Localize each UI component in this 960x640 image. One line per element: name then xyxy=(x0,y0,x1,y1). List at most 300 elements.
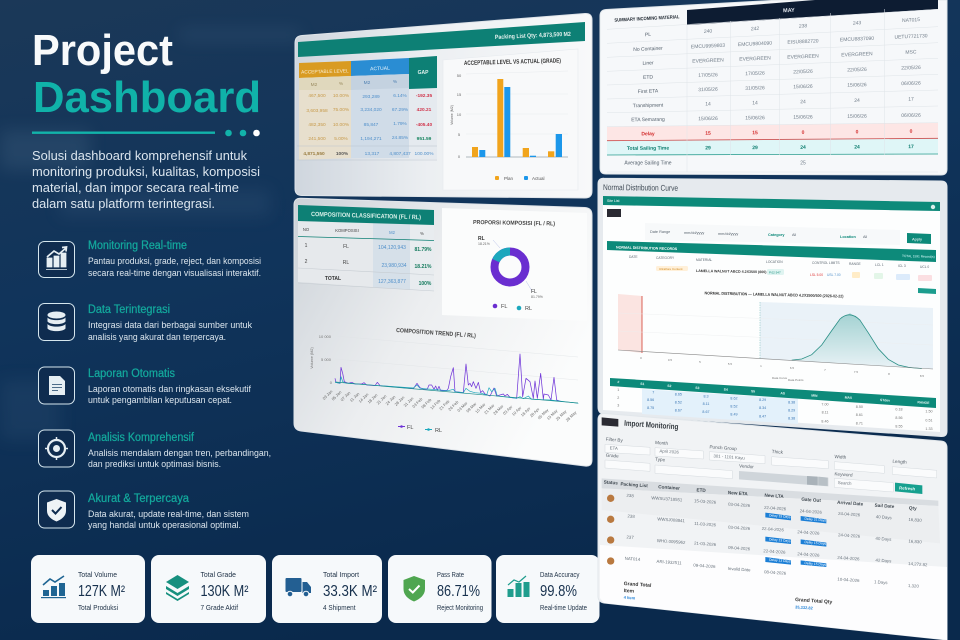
row 3: 237 xyxy=(626,534,634,540)
row 3: 24-04-2026 xyxy=(837,555,860,561)
table header and shaded rows: Packing List xyxy=(620,481,648,488)
acceptable level table: 75.00% xyxy=(333,107,350,113)
title divider with dots xyxy=(32,130,260,136)
row: ETD: 22/05/26 xyxy=(793,69,813,75)
icon: database xyxy=(38,304,74,340)
row: delay: 0 xyxy=(856,129,859,135)
row: ETD: 17/05/26 xyxy=(698,72,718,79)
row 3: 21-03-2026 xyxy=(694,541,717,547)
row 3 xyxy=(607,534,928,567)
statistics table: 8.50 xyxy=(856,405,863,409)
chart: composition trend: 15 May xyxy=(546,408,558,421)
statistics table: # xyxy=(617,380,620,384)
icon: document xyxy=(38,367,74,404)
stat card: data accuracy: Real-time Update xyxy=(540,603,587,612)
row: transhipment: 24 xyxy=(854,98,860,104)
filter form: Keyword xyxy=(834,471,853,478)
feature: laporan otomatis: untuk pengambilan keputusan cepat. xyxy=(88,395,232,406)
feature: akurat dan terpercaya: yang handal untuk operasional optimal. xyxy=(88,520,241,531)
filter row: All xyxy=(863,235,867,239)
acceptable level table: 241,500 xyxy=(308,136,326,142)
row: first ETA: 31/05/26 xyxy=(698,87,718,93)
statistics table: RANGE xyxy=(917,400,930,405)
filter form: 301 - 1101 Kayu xyxy=(713,453,746,461)
records table: CONTROL LIMITS xyxy=(812,261,840,265)
row 1 xyxy=(607,493,922,523)
row 4: Invalid Date xyxy=(728,566,751,573)
row 4: 1 Days xyxy=(874,579,888,585)
chart: composition trend: 21 Feb xyxy=(438,398,451,411)
row: no container: EMCU9804090 xyxy=(738,41,772,48)
row 1: 238 xyxy=(626,493,634,498)
row: ETD: 17/05/26 xyxy=(745,71,765,77)
acceptable level table: M2 xyxy=(311,82,318,88)
row: average sailing time: 25 xyxy=(800,160,806,166)
chart: composition trend: 28 May xyxy=(565,410,577,423)
statistics table: 8.46 xyxy=(821,419,829,423)
row: delay: 15 xyxy=(705,131,711,137)
donut chart: proporsi komposisi: RL xyxy=(525,306,532,312)
composition classification table: 100% xyxy=(419,281,432,287)
feature: laporan otomatis: Laporan otomatis dan ringkasan eksekutif xyxy=(88,384,251,395)
chart: normal distribution: 0 xyxy=(640,356,642,360)
row 4: 1,320 xyxy=(908,583,920,589)
row 2 xyxy=(607,513,922,547)
row: total sailing time: Total Sailing Time xyxy=(627,146,669,152)
table header and shaded rows: Status xyxy=(603,480,618,486)
row: average sailing time: Average Sailing Time xyxy=(624,160,672,166)
records table: UCL 0 xyxy=(920,265,929,269)
filter form: Grade xyxy=(606,453,619,459)
donut chart: proporsi komposisi: RL xyxy=(478,236,485,242)
chart: composition trend: 25 May xyxy=(555,409,567,422)
statistics table: 8.62 xyxy=(730,396,738,400)
row 1: 22-04-2026 xyxy=(764,505,787,511)
row: transhipment: 14 xyxy=(752,100,758,106)
heading: Normal Distribution Curve xyxy=(603,183,678,193)
filter row: Location xyxy=(840,235,857,239)
icon: rising chart xyxy=(38,242,74,278)
statistics table xyxy=(610,378,936,431)
chart: composition trend: 11 Jan xyxy=(349,391,360,403)
acceptable level table: 10.00% xyxy=(333,122,350,128)
stat card: total grade xyxy=(151,555,266,623)
donut chart: proporsi komposisi: FL xyxy=(501,304,507,310)
statistics table: 8.56 xyxy=(647,398,654,402)
statistics table: 1.33 xyxy=(925,427,933,431)
statistics table: 8.49 xyxy=(730,412,738,416)
statistics table: 8.67 xyxy=(702,410,710,414)
statistics table: 7 xyxy=(652,391,654,395)
statistics table: 8.3 xyxy=(703,394,709,398)
row: PL: 243 xyxy=(853,20,861,27)
acceptable level table: 3,603,958 xyxy=(306,108,328,114)
row: no container: UETU7721730 xyxy=(894,33,928,41)
row: ETA semarang: 15/06/26 xyxy=(793,114,813,121)
chart: acceptable level vs actual: Actual xyxy=(532,176,545,181)
acceptable level table: ACTUAL xyxy=(370,66,390,72)
composition classification table: % xyxy=(420,231,424,236)
chart: composition trend: 03 Jan xyxy=(321,389,333,401)
row: total sailing time: 24 xyxy=(854,144,860,150)
acceptable level table: 4,871,550 xyxy=(303,151,325,157)
chart: normal distribution: NORMAL DISTRIBUTION — LAMELLA WALNUT ABCD 4.2X3500/500 (2026-02-22) xyxy=(704,290,844,299)
table header and shaded rows: Gate Out xyxy=(801,497,822,503)
statistics table: MIN xyxy=(811,393,818,398)
row: ETA semarang: 06/06/26 xyxy=(901,113,921,119)
composition classification table: TOTAL xyxy=(325,276,341,282)
records table: ICL 3 xyxy=(898,264,906,268)
feature: data terintegrasi xyxy=(38,304,252,343)
table header and shaded rows: New ETA xyxy=(728,490,748,496)
statistics table: 8.75 xyxy=(647,406,654,410)
row 2: 238 xyxy=(627,513,635,519)
row: total sailing time xyxy=(627,144,914,152)
stat card: total grade: Total Grade xyxy=(200,570,236,579)
row 1: 40 Days xyxy=(876,514,892,520)
row: first ETA: 15/06/26 xyxy=(847,82,867,89)
acceptable level table: 85,847 xyxy=(364,122,379,128)
panel: composition xyxy=(294,198,592,466)
row 4: ARI-1932511 xyxy=(656,559,682,566)
row: PL: 242 xyxy=(751,26,759,32)
acceptable level table: 10.00% xyxy=(333,93,350,99)
icon: shield xyxy=(38,491,74,528)
row: first ETA xyxy=(638,81,921,95)
donut chart: proporsi komposisi: 81.79% xyxy=(531,295,543,299)
composition classification table: NO xyxy=(303,227,310,232)
chart: composition trend: 31 Jan xyxy=(402,396,414,408)
chart: normal distribution: 5.5 xyxy=(728,362,732,366)
chart: acceptable level vs actual: 0 xyxy=(458,154,461,159)
delay and total rows xyxy=(607,123,938,155)
donut chart: proporsi komposisi: 18.21% xyxy=(478,242,490,246)
chart: composition trend: RL xyxy=(435,428,442,434)
row 3: 24-04-2026 xyxy=(797,551,820,558)
statistics table: 8.11 xyxy=(703,402,709,406)
chart: acceptable level vs actual: ACCEPTABLE LEVEL VS ACTUAL (GRADE) xyxy=(464,57,561,67)
row 1: 24-04-2026 xyxy=(838,511,861,517)
panel: normal distribution curve xyxy=(598,178,947,437)
row 2: Delay 15 Days xyxy=(804,540,826,546)
row 3: Delay 15 Days xyxy=(804,561,826,567)
records table: USL 7.00 xyxy=(827,273,841,277)
statistics table: S2 xyxy=(667,384,672,388)
chart: composition trend: 18 Apr xyxy=(520,405,532,418)
chart: composition trend: 28 Mar xyxy=(492,403,505,416)
month header: MAY xyxy=(783,8,795,14)
statistics table: 8.38 xyxy=(788,400,795,404)
table header and shaded rows: Sail Date xyxy=(874,503,895,509)
filter row: Apply xyxy=(912,236,922,242)
records table: NORMAL DISTRIBUTION RECORDS xyxy=(616,246,678,251)
month header xyxy=(614,0,938,25)
chart: composition trend: FL xyxy=(407,425,413,431)
acceptable level table: -405.40 xyxy=(416,122,432,128)
icon: green shield xyxy=(404,576,425,602)
statistics table: 7.00 xyxy=(821,403,829,407)
statistics table: S1 xyxy=(640,382,645,386)
acceptable level table: 4,807,437 xyxy=(389,151,411,157)
chart: normal distribution: Data Points xyxy=(788,378,804,382)
row: PL: PL xyxy=(645,32,651,38)
chart: composition trend: 5 000 xyxy=(321,357,332,362)
feature: analisis komprehensif: dan prediksi untuk optimasi bisnis. xyxy=(88,459,221,470)
panel: summary incoming material xyxy=(600,0,947,175)
row 3: 22-04-2026 xyxy=(763,548,786,555)
stat card: total volume: 127K M² xyxy=(78,583,125,600)
row: transhipment: 24 xyxy=(800,99,806,105)
acceptable level table: % xyxy=(393,79,398,85)
row: delay: Delay xyxy=(641,131,655,137)
statistics table: 8.71 xyxy=(856,422,863,426)
acceptable level table: 6.14% xyxy=(393,93,408,99)
row 2: WWSJ008841 xyxy=(657,516,686,523)
chart: composition trend: 0 xyxy=(330,380,333,385)
acceptable level table: 100% xyxy=(336,151,349,157)
chart: composition trend: 05 Jan xyxy=(330,390,342,402)
filter form: Refresh xyxy=(899,485,916,491)
row: PL: 238 xyxy=(799,23,807,30)
filter form: Filter By xyxy=(606,437,624,443)
acceptable level table: 5.00% xyxy=(334,136,349,142)
statistics table: 8.52 xyxy=(675,400,682,404)
filter form: Month xyxy=(655,440,669,446)
icon: layers xyxy=(166,575,189,601)
acceptable level table: M2 xyxy=(364,80,371,86)
acceptable level table: 467,500 xyxy=(308,93,326,99)
panel: acceptable level vs actual xyxy=(295,13,592,198)
chart: composition trend: 10 Apr xyxy=(511,405,523,417)
grand total: 35,332.82 xyxy=(795,604,814,611)
feature: laporan otomatis: Laporan Otomatis xyxy=(88,368,175,380)
row: PL: NAT015 xyxy=(902,17,920,24)
feature: monitoring real-time: secara real-time dengan visualisasi interaktif. xyxy=(88,268,261,279)
acceptable level table: 1.79% xyxy=(393,121,408,127)
filter row: mm/dd/yyyy xyxy=(718,232,738,236)
row: ETD: 22/05/26 xyxy=(847,67,867,74)
feature: data terintegrasi: Data Terintegrasi xyxy=(88,304,170,316)
row 1: 03-04-2026 xyxy=(728,502,751,508)
row 1: 24-04-2026 xyxy=(800,508,823,515)
site list bar: Site List xyxy=(607,199,619,203)
row: delay: 0 xyxy=(802,130,805,136)
records table: LAMELLA WALNUT ABCD 4.2X3500 (600) xyxy=(696,269,767,274)
row 2: 03-04-2026 xyxy=(728,525,751,531)
heading: Import Monitoring xyxy=(624,419,679,431)
row 1: 15-03-2026 xyxy=(694,498,717,505)
chart: normal distribution: 0.5 xyxy=(668,358,672,362)
records table: RANGE xyxy=(849,262,862,266)
composition classification table: M2 xyxy=(389,230,396,235)
statistics table: 1.50 xyxy=(925,410,933,414)
chart: normal distribution: 7 xyxy=(824,368,826,372)
table header and shaded rows: Container xyxy=(658,484,680,491)
chart: composition trend: 15 Mar xyxy=(474,401,487,414)
chart: composition trend: 28 Jan xyxy=(393,395,405,407)
statistics table: 0.51 xyxy=(925,419,933,423)
row: ETD: 22/05/26 xyxy=(901,65,921,72)
statistics table: AS xyxy=(780,391,786,396)
row: ETA semarang: ETA Semarang xyxy=(631,117,665,123)
chart: acceptable level vs actual: 5 xyxy=(458,132,461,137)
row: first ETA: First ETA xyxy=(638,88,659,95)
row: ETD: ETD xyxy=(643,75,653,81)
row 2: 22-04-2026 xyxy=(762,526,785,532)
acceptable level table: % xyxy=(339,81,344,87)
row: liner: Liner xyxy=(642,60,654,67)
table header and shaded rows: Arrival Date xyxy=(837,500,864,507)
row: transhipment: 17 xyxy=(908,97,914,103)
acceptable level table: 420.21 xyxy=(417,107,432,113)
statistics table: 2 xyxy=(617,396,619,400)
filter row xyxy=(645,223,931,245)
row: no container: No Container xyxy=(633,46,663,53)
row: ETA semarang: 15/06/26 xyxy=(745,115,765,121)
statistics table: S4 xyxy=(724,388,728,392)
acceptable level table: 13,317 xyxy=(365,151,380,157)
grand total xyxy=(624,581,833,611)
composition classification table: KOMPOSISI xyxy=(335,228,359,233)
row 2: Delay 13 Days xyxy=(769,537,791,543)
row: delay: 0 xyxy=(910,129,913,135)
row: delay: 15 xyxy=(752,130,758,136)
statistics table: S3 xyxy=(695,386,700,390)
chart: normal distribution: 8.5 xyxy=(920,374,924,378)
chart: composition trend: 14 Jan xyxy=(357,392,369,404)
acceptable level table: 67.29% xyxy=(392,107,409,113)
table header and shaded rows: Qty xyxy=(909,505,917,511)
chart: composition trend: 03 Apr xyxy=(502,404,514,416)
row: no container: EISU8882720 xyxy=(787,38,819,46)
filter form: Thick xyxy=(772,449,784,455)
row 4: NAT014 xyxy=(625,556,641,562)
row 2: 11-03-2026 xyxy=(694,521,717,527)
donut chart: proporsi komposisi xyxy=(442,208,587,321)
feature: monitoring real-time: Pantau produksi, grade, reject, dan komposisi xyxy=(88,256,261,267)
row: ETA semarang: 15/06/26 xyxy=(847,114,867,120)
composition classification table: 2 xyxy=(305,259,308,265)
chart: normal distribution: 8 xyxy=(888,372,890,376)
chart: composition trend: 03 Feb xyxy=(411,396,424,409)
grand total: Item xyxy=(624,588,635,595)
feature: analisis komprehensif xyxy=(38,430,271,470)
chart: acceptable level vs actual: Volume (M2) xyxy=(450,105,454,125)
acceptable level table: -192.35 xyxy=(416,93,432,99)
stat card: total import: 4 Shipment xyxy=(323,603,356,612)
acceptable level table: ACCEPTABLE LEVEL xyxy=(301,68,349,76)
chart: normal distribution: 7.5 xyxy=(854,370,858,374)
icon: target xyxy=(38,430,74,467)
feature: data terintegrasi: analisis yang akurat dan terpercaya. xyxy=(88,332,226,343)
feature: analisis komprehensif: Analisis mendalam dengan tren, perbandingan, xyxy=(88,448,271,459)
statistics table: 8.47 xyxy=(759,415,766,419)
stat card: total grade: 130K M² xyxy=(200,583,248,600)
filter form: Punch Group xyxy=(709,444,737,451)
month header: SUMMARY INCOMING MATERIAL xyxy=(614,14,680,24)
icon: truck xyxy=(286,578,311,597)
row: total sailing time: 29 xyxy=(752,145,758,151)
title xyxy=(32,26,261,122)
row: transhipment: 14 xyxy=(705,101,711,108)
title: Project xyxy=(32,26,173,75)
icon: bar chart xyxy=(41,576,66,598)
feature: monitoring real-time xyxy=(38,240,261,279)
chart: normal distribution: Data Curve xyxy=(772,376,788,380)
filter row: Date Range xyxy=(650,230,670,234)
feature: akurat dan terpercaya xyxy=(38,491,249,531)
chart: composition trend: Volume (M2) xyxy=(310,347,314,369)
donut chart: proporsi komposisi: PROPORSI KOMPOSISI (FL / RL) xyxy=(473,220,555,227)
back button xyxy=(602,417,618,427)
filter form: Type xyxy=(655,457,666,462)
acceptable level table: 482,350 xyxy=(308,122,326,128)
filter row: mm/dd/yyyy xyxy=(684,231,704,235)
row 3: 14,272.82 xyxy=(908,561,928,567)
chart: acceptable level vs actual: Plan xyxy=(504,176,514,181)
chart: acceptable level vs actual: 10 xyxy=(457,112,462,117)
filter form: Search xyxy=(838,480,852,486)
acceptable level table: GAP xyxy=(418,70,429,76)
table header and shaded rows: New LTA xyxy=(764,493,784,499)
row: liner: MSC xyxy=(905,49,917,56)
records table: Ultraflore Content xyxy=(659,267,683,271)
chart: composition trend: 05 May xyxy=(537,408,549,420)
row: liner: EVERGREEN xyxy=(692,57,724,65)
stat card: total import: 33.3K M² xyxy=(323,583,377,600)
chart: composition trend: 14 Feb xyxy=(429,398,442,410)
acceptable level table: 1,194,271 xyxy=(360,136,382,142)
filter form: ETA xyxy=(610,445,618,451)
chart: composition trend: 21 Jan xyxy=(375,394,387,406)
row: PL: 240 xyxy=(704,28,712,35)
row: total sailing time: 24 xyxy=(800,145,806,151)
row: total sailing time: 17 xyxy=(908,144,914,150)
row: first ETA: 31/05/26 xyxy=(745,85,765,92)
table header and shaded rows: ETD xyxy=(696,487,707,493)
row: ETD xyxy=(643,65,921,81)
chart: composition trend: COMPOSITION TREND (FL / RL) xyxy=(396,328,476,340)
statistics table: 0.18 xyxy=(895,408,903,412)
filter row: All xyxy=(792,233,796,237)
chart: acceptable level vs actual xyxy=(443,49,578,190)
filter row: Category xyxy=(768,233,785,237)
acceptable level table: 951.59 xyxy=(417,136,432,142)
filter form: Width xyxy=(834,454,847,460)
row: average sailing time xyxy=(624,160,806,166)
row 1: 16,830 xyxy=(908,517,922,523)
stat card: total import xyxy=(272,555,382,623)
chart: composition trend: 07 Jan xyxy=(339,390,351,402)
grand total: Grand Total xyxy=(624,581,652,589)
row 2: 16,830 xyxy=(908,539,922,544)
intro text: monitoring produksi, kualitas, komposisi xyxy=(32,164,260,179)
grand total: Grand Total Qty xyxy=(795,597,833,606)
filter form xyxy=(605,437,937,494)
filter form: April 2026 xyxy=(659,448,680,455)
statistics table: S5 xyxy=(751,389,755,393)
statistics table: 8.38 xyxy=(788,417,795,421)
row: transhipment: Transhipment xyxy=(633,103,664,109)
records table: DATE xyxy=(629,255,638,259)
feature: monitoring real-time: Monitoring Real-time xyxy=(88,240,187,252)
records table: LCL 1 xyxy=(875,263,884,267)
row 2: 24-04-2026 xyxy=(838,532,861,539)
intro text: Solusi dashboard komprehensif untuk xyxy=(32,148,247,163)
row: delay xyxy=(641,129,913,137)
composition classification table: COMPOSITION CLASSIFICATION (FL / RL) xyxy=(311,211,421,221)
row: transhipment xyxy=(633,97,914,109)
